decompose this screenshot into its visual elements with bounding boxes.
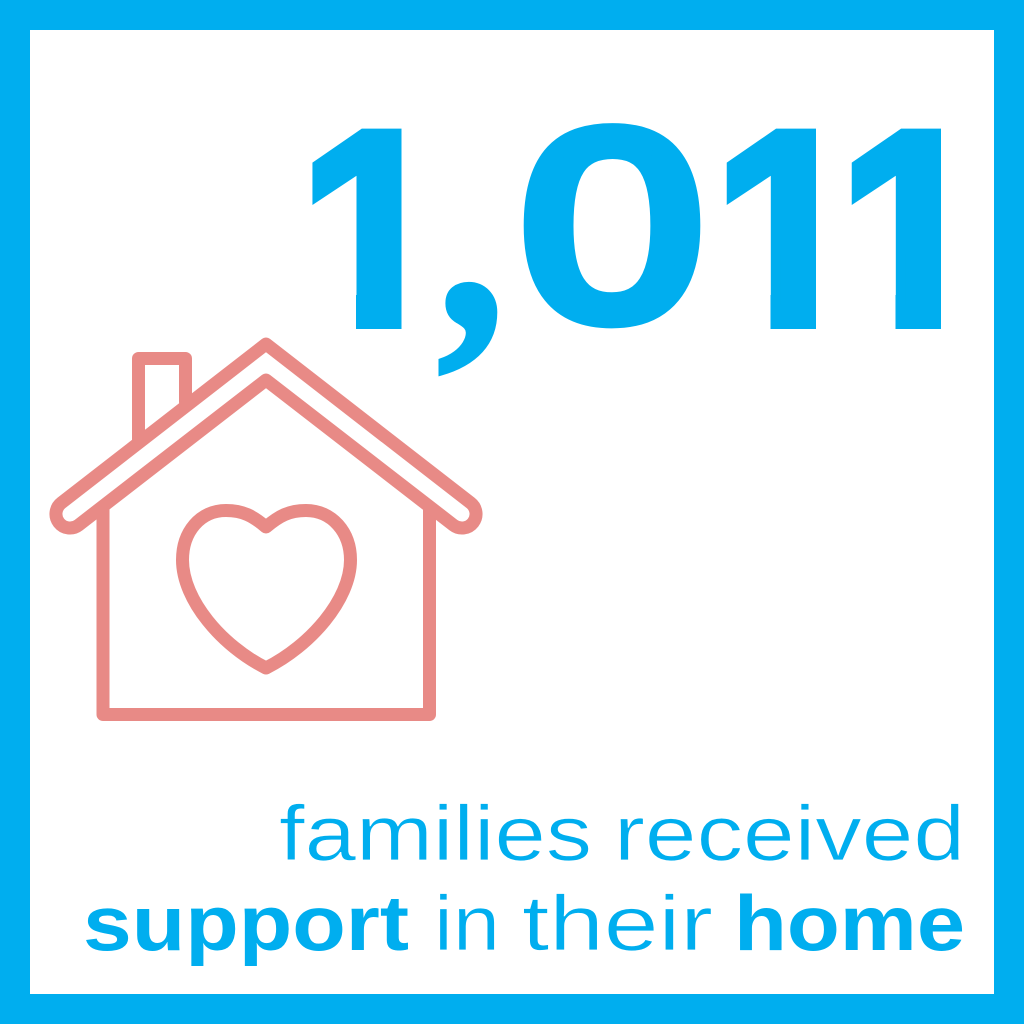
caption line 2: support — [83, 879, 409, 967]
caption — [83, 789, 965, 967]
big number: 1 — [713, 72, 862, 390]
caption line 1 — [279, 789, 965, 877]
caption line 2: home — [734, 879, 965, 967]
caption line 2: in — [434, 879, 500, 967]
caption line 2 — [83, 879, 965, 967]
icon: heart — [182, 510, 350, 668]
big number — [312, 123, 941, 376]
big number: , — [437, 64, 506, 393]
big number: 1 — [299, 72, 447, 390]
caption line 2: their — [522, 879, 713, 967]
icon: house walls — [103, 507, 430, 714]
caption line 1: families — [279, 789, 592, 877]
caption line 1: received — [614, 789, 965, 877]
icon: chimney — [138, 358, 186, 441]
big number: 1 — [838, 72, 987, 390]
big number: 0 — [521, 78, 703, 375]
icon: roof — [56, 344, 476, 528]
icon: house with heart — [56, 344, 476, 714]
